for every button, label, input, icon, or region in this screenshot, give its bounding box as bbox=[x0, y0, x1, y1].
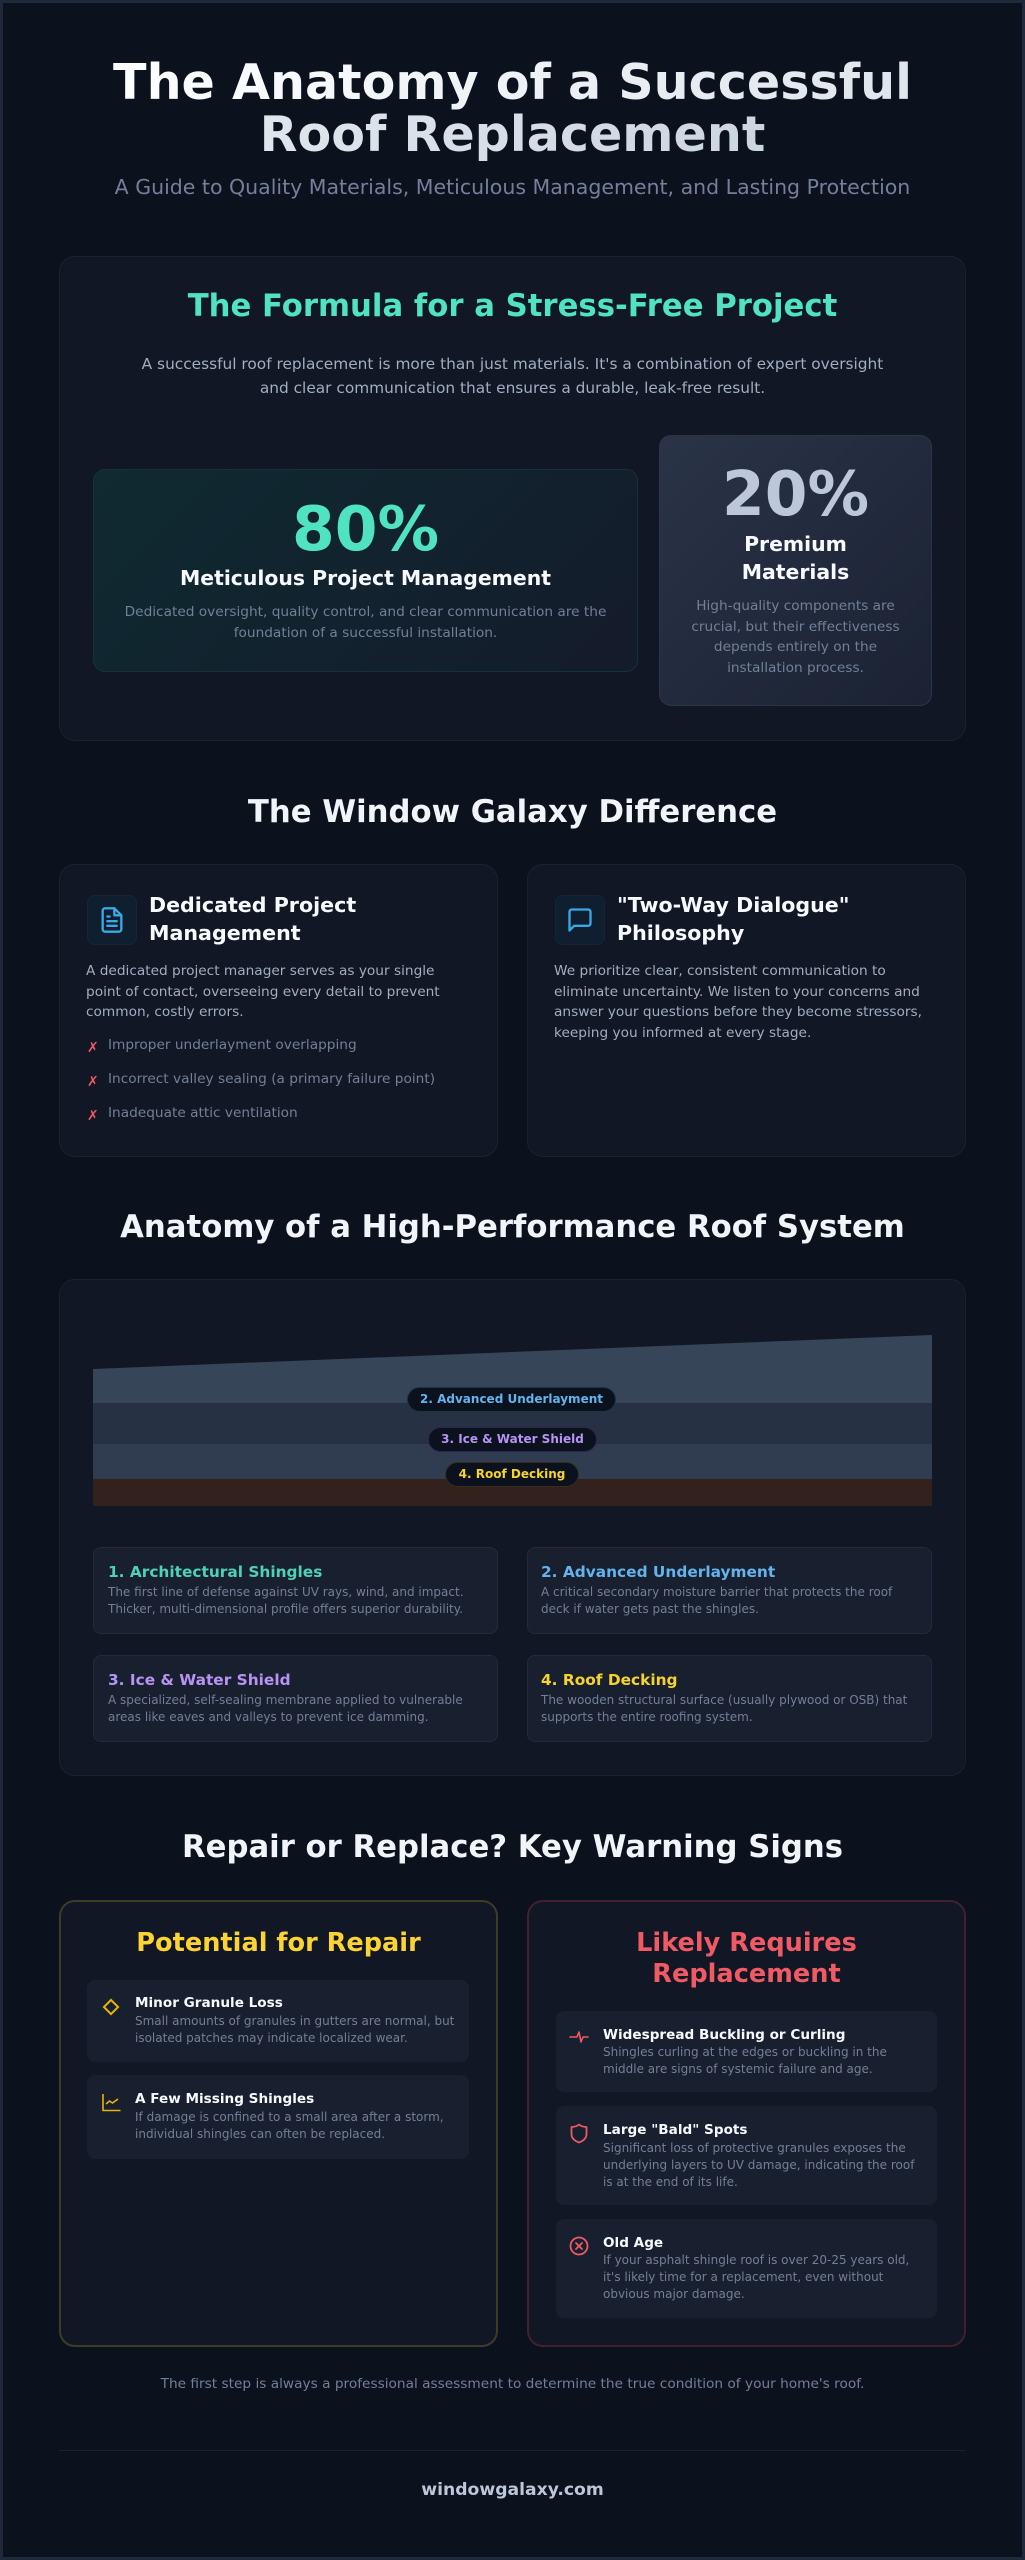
stat card: 20 percent bbox=[659, 435, 932, 706]
card text bbox=[108, 1585, 464, 1616]
panel: two-way dialogue bbox=[527, 864, 966, 1157]
sign text: Shingles curling at the edges or buckling in the bbox=[603, 2045, 887, 2059]
card text: supports the entire roofing system. bbox=[541, 1710, 753, 1724]
sign: minor granule loss bbox=[87, 1980, 469, 2062]
label: ice and water shield bbox=[428, 1427, 597, 1452]
sign title: Old Age bbox=[603, 2235, 663, 2251]
card text: areas like eaves and valleys to prevent ice damming. bbox=[108, 1710, 429, 1724]
card text bbox=[541, 1585, 892, 1616]
title: The Anatomy of a Successful bbox=[113, 53, 912, 111]
card paragraph: point of contact, overseeing every detail to prevent bbox=[86, 984, 440, 1000]
card paragraph: keeping you informed at every stage. bbox=[554, 1024, 811, 1040]
card text: A specialized, self-sealing membrane applied to vulnerable bbox=[108, 1693, 463, 1707]
sign text: middle are signs of systemic failure and age. bbox=[603, 2062, 873, 2076]
panel heading: Replacement bbox=[652, 1959, 841, 1989]
sign text bbox=[603, 2045, 887, 2076]
sign text bbox=[135, 2110, 444, 2141]
sign title: Large "Bald" Spots bbox=[603, 2122, 748, 2138]
formula intro text: A successful roof replacement is more than just materials. It's a combination of expert oversight bbox=[142, 355, 883, 373]
card title: 1. Architectural Shingles bbox=[108, 1563, 322, 1581]
sign text: If damage is confined to a small area after a storm, bbox=[135, 2110, 444, 2124]
panel: potential for repair bbox=[59, 1900, 498, 2347]
title bbox=[113, 53, 912, 163]
card text bbox=[108, 1693, 463, 1724]
formula heading: The Formula for a Stress-Free Project bbox=[188, 288, 837, 324]
card heading: Philosophy bbox=[617, 920, 744, 944]
label: roof decking bbox=[445, 1462, 579, 1487]
sign title: A Few Missing Shingles bbox=[135, 2091, 314, 2107]
panel: likely requires replacement bbox=[527, 1900, 966, 2347]
card: advanced underlayment bbox=[527, 1547, 932, 1634]
sign text: it's likely time for a replacement, even without bbox=[603, 2270, 883, 2284]
sign text bbox=[603, 2140, 915, 2188]
error list: ✗ bbox=[87, 1040, 99, 1056]
stat card: 80 percent bbox=[93, 469, 638, 672]
card paragraph: common, costly errors. bbox=[86, 1004, 244, 1020]
error list: Improper underlayment overlapping bbox=[108, 1037, 357, 1053]
subtitle: A Guide to Quality Materials, Meticulous Management, and Lasting Protection bbox=[115, 175, 910, 199]
sign text: isolated patches may indicate localized wear. bbox=[135, 2031, 408, 2045]
stat description: High-quality components are bbox=[696, 598, 895, 614]
stat value 20%: 20% bbox=[722, 459, 869, 530]
label: underlayment: 2. Advanced Underlayment bbox=[420, 1392, 603, 1406]
panel heading: Likely Requires bbox=[636, 1928, 857, 1958]
heading: anatomy: Anatomy of a High-Performance Roof System bbox=[120, 1209, 905, 1245]
card paragraph: A dedicated project manager serves as your single bbox=[86, 963, 434, 979]
stat description: Dedicated oversight, quality control, and clear communication are the bbox=[125, 604, 606, 620]
card heading: Management bbox=[149, 920, 301, 944]
error list: Inadequate attic ventilation bbox=[108, 1105, 298, 1121]
icon: speech bubble bbox=[555, 895, 605, 945]
sign title: Widespread Buckling or Curling bbox=[603, 2027, 845, 2043]
icon: x in circle bbox=[570, 2236, 588, 2256]
sign title: Minor Granule Loss bbox=[135, 1995, 283, 2011]
panel: roof system bbox=[59, 1279, 966, 1776]
stat label: Premium bbox=[744, 532, 847, 556]
error list: ✗ bbox=[87, 1074, 99, 1090]
stat label: Materials bbox=[742, 560, 849, 584]
title: Roof Replacement bbox=[260, 105, 765, 163]
icon: line chart bbox=[102, 2094, 120, 2112]
sign text bbox=[603, 2253, 909, 2301]
formula intro text bbox=[142, 355, 883, 397]
footer: website: windowgalaxy.com bbox=[421, 2480, 604, 2500]
error list: Incorrect valley sealing (a primary failure point) bbox=[108, 1071, 435, 1087]
error list bbox=[87, 1037, 435, 1124]
card text: The first line of defense against UV rays, wind, and impact. bbox=[108, 1585, 464, 1599]
panel: dedicated project management bbox=[59, 864, 498, 1157]
stat description: crucial, but their effectiveness bbox=[691, 618, 900, 634]
icon: shield bbox=[570, 2124, 588, 2144]
sign text: Significant loss of protective granules exposes the bbox=[603, 2140, 906, 2154]
stat label: Meticulous Project Management bbox=[180, 566, 551, 590]
error list: ✗ bbox=[87, 1108, 99, 1124]
card title: 4. Roof Decking bbox=[541, 1671, 678, 1689]
card title: 3. Ice & Water Shield bbox=[108, 1671, 291, 1689]
card text bbox=[540, 1693, 908, 1724]
sign: buckling bbox=[556, 2011, 937, 2092]
icon: pulse bbox=[569, 2031, 589, 2043]
card paragraph: answer your questions before they become stressors, bbox=[554, 1004, 922, 1020]
stat label bbox=[742, 532, 849, 584]
card text: The wooden structural surface (usually plywood or OSB) that bbox=[541, 1693, 907, 1707]
stat description: foundation of a successful installation. bbox=[234, 624, 497, 640]
card text: Thicker, multi-dimensional profile offers superior durability. bbox=[108, 1602, 463, 1616]
sign text: If your asphalt shingle roof is over 20-25 years old, bbox=[603, 2253, 909, 2267]
card paragraph: We prioritize clear, consistent communication to bbox=[554, 963, 886, 979]
panel: formula bbox=[59, 256, 966, 741]
formula intro text: and clear communication that ensures a durable, leak-free result. bbox=[260, 379, 765, 397]
sign text bbox=[135, 2014, 454, 2045]
card: roof decking bbox=[527, 1655, 932, 1742]
card heading: "Two-Way Dialogue" bbox=[617, 893, 850, 917]
card heading bbox=[149, 893, 356, 944]
sign text: obvious major damage. bbox=[603, 2287, 745, 2301]
heading: warning signs: Repair or Replace? Key Warning Signs bbox=[182, 1829, 843, 1865]
card paragraph bbox=[554, 963, 922, 1040]
card heading bbox=[617, 893, 850, 944]
sign text: underlying layers to UV damage, indicating the roof bbox=[603, 2158, 914, 2172]
stat description: installation process. bbox=[727, 660, 864, 676]
roof layer diagram bbox=[93, 1335, 932, 1506]
stat description bbox=[691, 598, 900, 676]
sign: bald spots bbox=[556, 2106, 937, 2205]
stat value 80%: 80% bbox=[292, 494, 439, 565]
closing note: The first step is always a professional assessment to determine the true condition of your home's roof. bbox=[161, 2376, 864, 2392]
card text: deck if water gets past the shingles. bbox=[541, 1602, 759, 1616]
card: ice and water shield bbox=[93, 1655, 498, 1742]
label: roof decking: 4. Roof Decking bbox=[459, 1467, 565, 1481]
card text: A critical secondary moisture barrier that protects the roof bbox=[541, 1585, 892, 1599]
sign: old age bbox=[556, 2219, 937, 2318]
sign text: is at the end of its life. bbox=[603, 2174, 738, 2188]
icon: document bbox=[87, 895, 137, 945]
sign text: Small amounts of granules in gutters are normal, but bbox=[135, 2014, 454, 2028]
panel heading: Potential for Repair bbox=[136, 1928, 421, 1958]
card: architectural shingles bbox=[93, 1547, 498, 1634]
label: ice and water shield: 3. Ice & Water Shield bbox=[441, 1432, 584, 1446]
stat description: depends entirely on the bbox=[714, 639, 877, 655]
card title: 2. Advanced Underlayment bbox=[541, 1563, 775, 1581]
label: underlayment bbox=[407, 1387, 616, 1412]
card paragraph bbox=[86, 963, 440, 1020]
card paragraph: eliminate uncertainty. We listen to your concerns and bbox=[554, 984, 920, 1000]
icon: diamond bbox=[102, 1998, 120, 2016]
card heading: Dedicated Project bbox=[149, 893, 356, 917]
stat description bbox=[125, 604, 606, 640]
sign text: individual shingles can often be replaced. bbox=[135, 2127, 385, 2141]
sign: a few missing shingles bbox=[87, 2075, 469, 2159]
heading: difference: The Window Galaxy Difference bbox=[248, 794, 777, 830]
panel heading bbox=[636, 1928, 857, 1989]
